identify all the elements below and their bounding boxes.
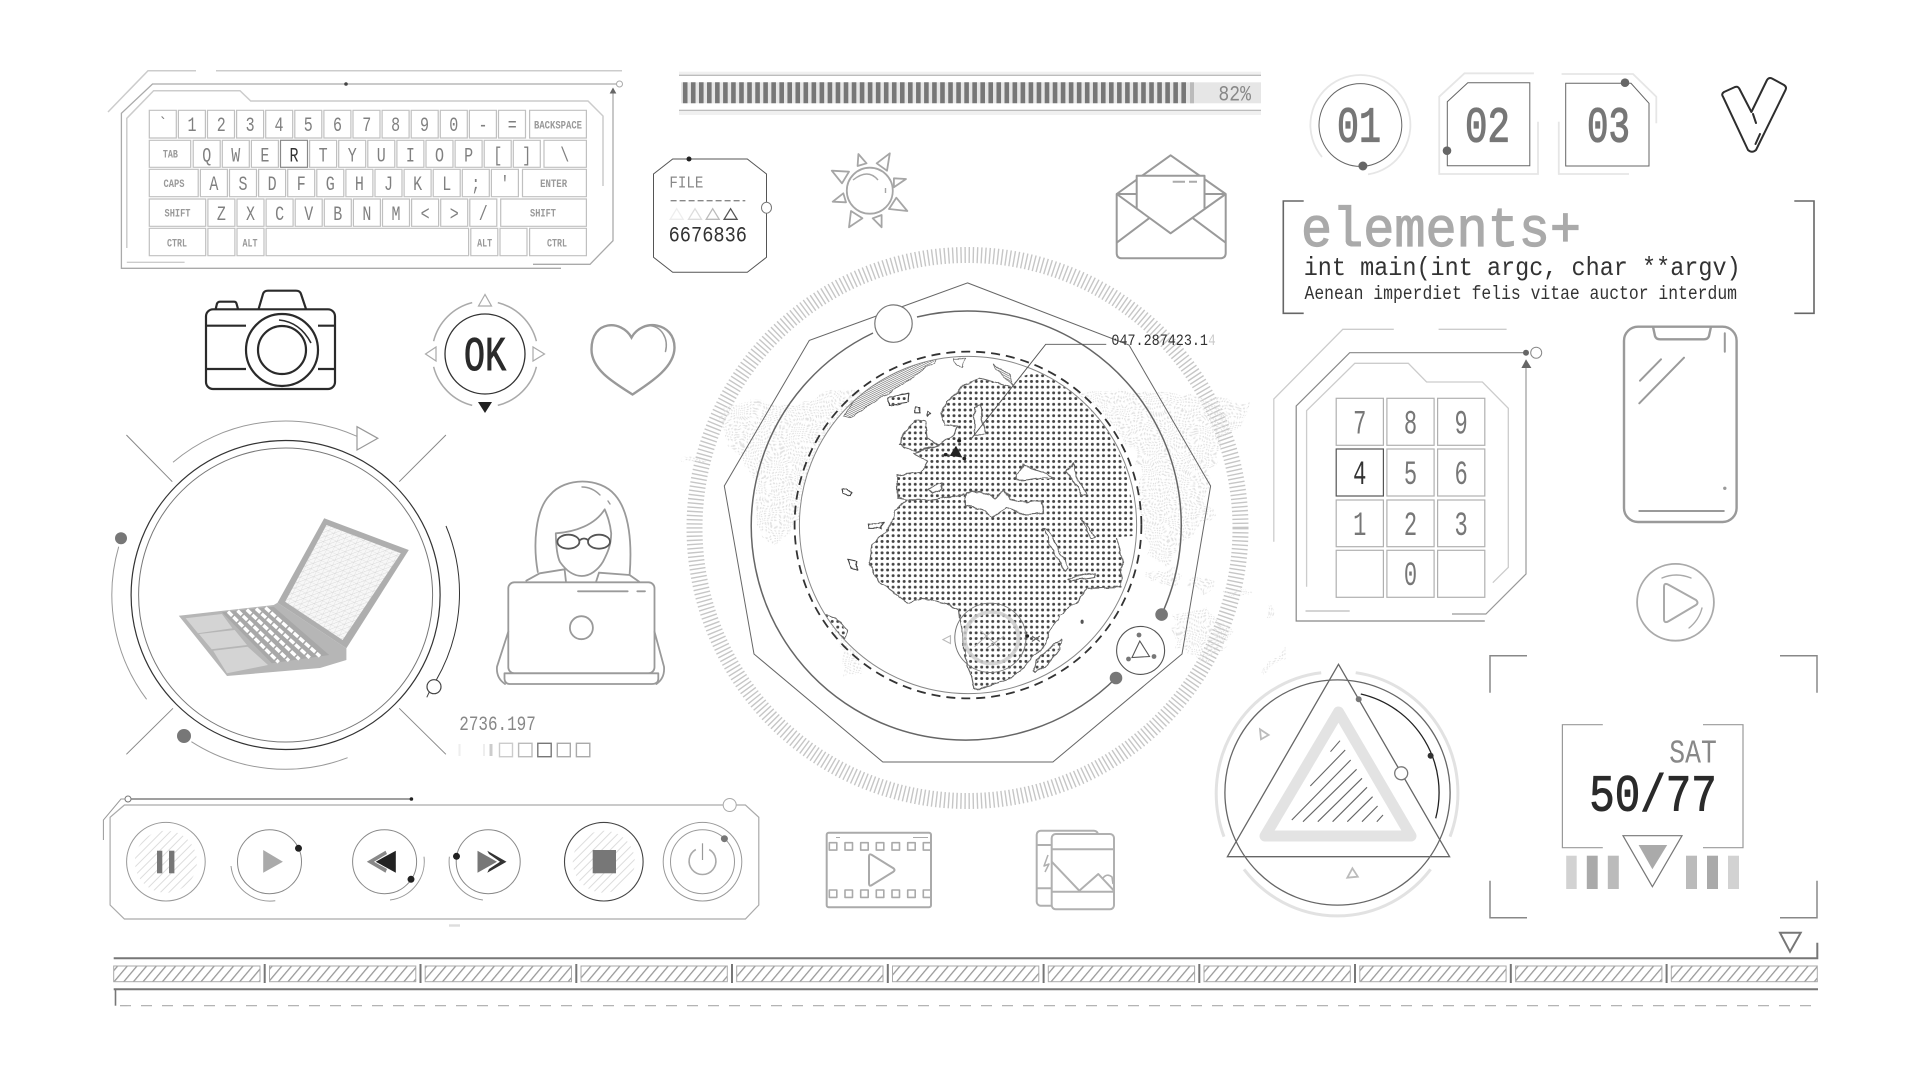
icon: check mark [1722,78,1786,152]
media panel frame [103,796,759,927]
data readout with squares [459,714,590,757]
panel: media controls [103,796,759,927]
rewind button [353,830,424,900]
keyboard function key labels: ALT [477,238,492,250]
outer octagon [724,283,1211,762]
icon: smartphone [1624,327,1737,522]
keypad digits: 4 [1353,456,1366,495]
keyboard key grid [149,110,586,256]
stop button [564,822,643,901]
panel: title text block: int main(int argc, char **argv) [1304,253,1741,283]
orbit rings [112,421,459,769]
panel: central globe HUD [680,255,1285,801]
faint world map dots [680,388,1285,681]
small orbit node top [875,305,912,342]
step badge 02: 02 [1465,101,1510,158]
progress bar: 82% [1218,83,1252,108]
progress bar [679,72,1261,115]
globe disc and rings [799,356,1137,694]
date number: 50/77 [1589,768,1717,827]
keypad digits: 789 [1353,405,1468,444]
icon: film strip [827,833,931,907]
icon: envelope [1117,155,1226,258]
panel: file counter [654,156,772,272]
step badge 01 [1310,75,1410,174]
keyboard function key labels: BACKSPACE [534,120,582,132]
small triangle node lower right [1110,608,1168,684]
keypad digits [1353,405,1468,596]
keypad frame lines [1274,329,1542,621]
keyboard letter legends: ZXCVBNM<>/ [217,204,488,227]
keyboard function key labels: ENTER [540,179,567,191]
panel: title text block: elements+ [1301,199,1581,263]
inner date frame [1562,725,1743,848]
icon: woman at laptop [497,482,664,684]
keyboard function key labels: CTRL [167,238,187,250]
keyboard letter legends: QWETYUIOP[]\ [202,146,569,168]
icon: sun [832,153,907,227]
keyboard function key labels: SHIFT [530,209,556,221]
panel: file counter: FILE [669,174,703,193]
icon: photo stack [1037,831,1114,909]
rail separators [265,964,1667,983]
keyboard frame lines [108,71,622,268]
step badge 03 [1559,74,1656,174]
triangle emblem [1216,664,1458,916]
keyboard function key labels [163,120,582,250]
rail marker triangle [1780,933,1801,952]
icon: OK dial: OK [464,331,506,385]
corner brackets [1490,656,1817,918]
bottom status rail [114,933,1818,1006]
level bars [1566,856,1739,889]
panel: title text block [1283,199,1814,313]
keypad digits: 123 [1353,507,1468,546]
panel: date display [1490,656,1817,918]
fast forward button [449,830,520,900]
keypad keys [1336,398,1485,597]
keyboard function key labels: CTRL [547,238,567,250]
step badge 01: 01 [1337,101,1381,158]
hatched rail segments [114,966,1817,982]
step badge 02 [1439,73,1538,174]
panel: numeric keypad [1274,329,1542,621]
panel: keyboard [108,71,622,268]
down indicator triangle [1623,836,1682,887]
keyboard function key labels: CAPS [164,179,185,191]
globe location marker and leader line [944,344,1106,460]
keyboard function key labels: TAB [163,149,178,161]
keyboard letter legends: `1234567890-= [158,115,517,138]
keyboard letter legends: ASDFGHJKL;' [209,174,509,197]
icon: heart [592,325,674,394]
keyboard letter legends [158,115,569,227]
keyboard letter legends: R [289,146,299,168]
data readout with squares: 2736.197 [459,714,536,737]
play button [231,830,302,901]
keypad digits: 0 [1404,557,1417,596]
globe continents [824,359,1133,689]
globe target reticle [943,603,1040,672]
rough coastlines [824,359,1122,689]
pause button [127,822,205,901]
icon: play circle [1637,564,1714,641]
day label: SAT [1669,736,1717,773]
panel: title text block: Aenean imperdiet felis vitae auctor interdum [1304,283,1737,305]
icon: OK dial [426,294,544,413]
step badge 03: 03 [1587,101,1630,158]
tick ring [694,255,1240,801]
panel: file counter: 6676836 [669,224,747,249]
rail lines [114,943,1818,989]
coordinates label: 4 [1208,332,1216,350]
keypad digits: 56 [1404,456,1468,495]
keyboard function key labels: ALT [242,238,258,250]
laptop illustration [179,518,409,676]
power button [663,822,742,901]
keyboard function key labels: SHIFT [164,209,191,221]
panel: laptop orbit [112,421,459,769]
HUD infographic canvas [102,70,1818,1006]
icon: camera [206,291,335,389]
coordinates label: 047.287423.1 [1111,332,1208,350]
